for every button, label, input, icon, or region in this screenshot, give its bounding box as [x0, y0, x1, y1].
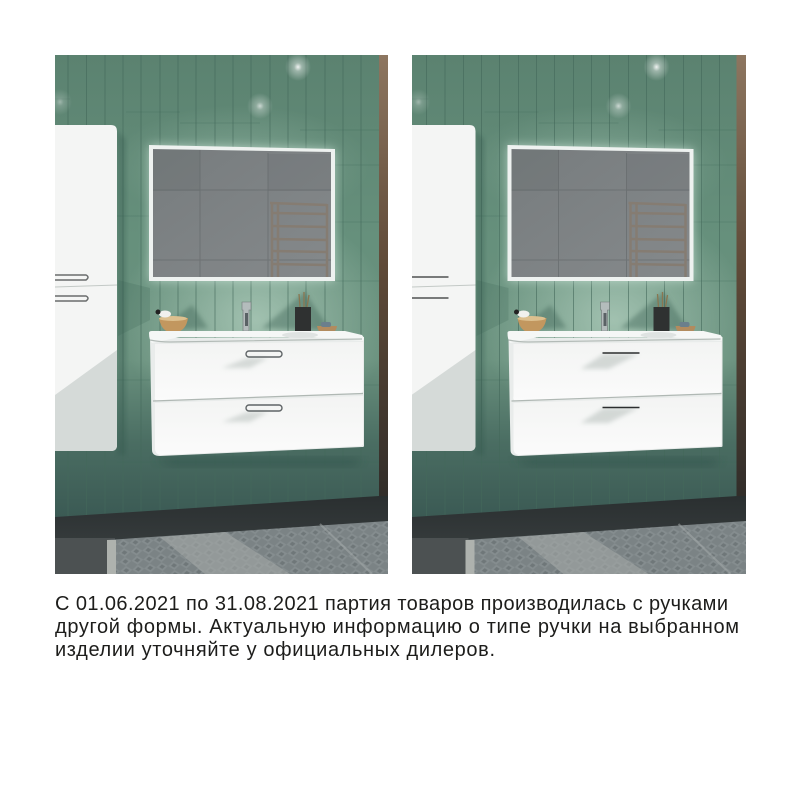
- caption line 1: С 01.06.2021 по 31.08.2021 партия товаров производилась с ручками: [55, 593, 728, 615]
- basin items: [514, 292, 696, 333]
- tiled green wall: [412, 55, 748, 517]
- bar handle top: [602, 352, 640, 354]
- photo: bathroom with looped handles: [48, 53, 390, 574]
- tall cabinet loop handles: [55, 275, 88, 301]
- small tray: [676, 326, 696, 333]
- tall cabinet: [412, 125, 476, 451]
- wood door strip: [379, 55, 388, 525]
- tiled green wall: [55, 55, 390, 517]
- loop handle bottom: [246, 405, 282, 411]
- tall cabinet bar handles: [412, 277, 448, 298]
- handle shadows: [580, 354, 638, 423]
- top drawer: [513, 342, 722, 401]
- floor: [412, 496, 746, 540]
- black cup with brushes: [654, 307, 670, 331]
- loop handle top: [246, 351, 282, 357]
- vanity unit: [149, 331, 364, 456]
- bottom drawer: [514, 396, 722, 455]
- wood door strip: [736, 55, 746, 496]
- mirror with backlight: [149, 145, 335, 281]
- cabinet and handle shadows on wall: [117, 130, 126, 455]
- wooden bowl: [159, 318, 188, 332]
- wall spot reflections: [48, 53, 311, 119]
- photo: bathroom with bar handles: [406, 53, 748, 574]
- mirror with backlight: [508, 145, 694, 281]
- wooden bowl: [518, 318, 546, 332]
- towel rail in mirror: [628, 202, 686, 277]
- top drawer: [155, 342, 363, 401]
- caption line 3: изделии уточняйте у официальных дилеров.: [55, 639, 495, 661]
- tall cabinet: [55, 125, 117, 451]
- caption text: [55, 593, 739, 661]
- vanity unit: [508, 331, 722, 456]
- small tray: [317, 326, 337, 331]
- worktop with basin: [508, 331, 722, 343]
- black cup with brushes: [295, 307, 311, 331]
- faucet: [242, 302, 251, 331]
- rug: [466, 521, 746, 574]
- bar handle bottom: [602, 406, 640, 408]
- bottom drawer: [155, 396, 363, 455]
- faucet: [600, 302, 610, 331]
- wall spot reflections: [406, 53, 670, 119]
- handle shadows: [222, 358, 268, 422]
- cabinet and handle shadows on wall: [476, 130, 484, 455]
- worktop with basin: [149, 331, 364, 343]
- basin items: [156, 292, 337, 333]
- towel rail in mirror: [270, 202, 327, 277]
- caption line 2: другой формы. Актуальную информацию о типе ручки на выбранном: [55, 616, 739, 638]
- soap and black brush: [518, 310, 530, 318]
- rug: [107, 521, 388, 574]
- floor: [55, 496, 388, 540]
- soap and black brush: [159, 310, 171, 318]
